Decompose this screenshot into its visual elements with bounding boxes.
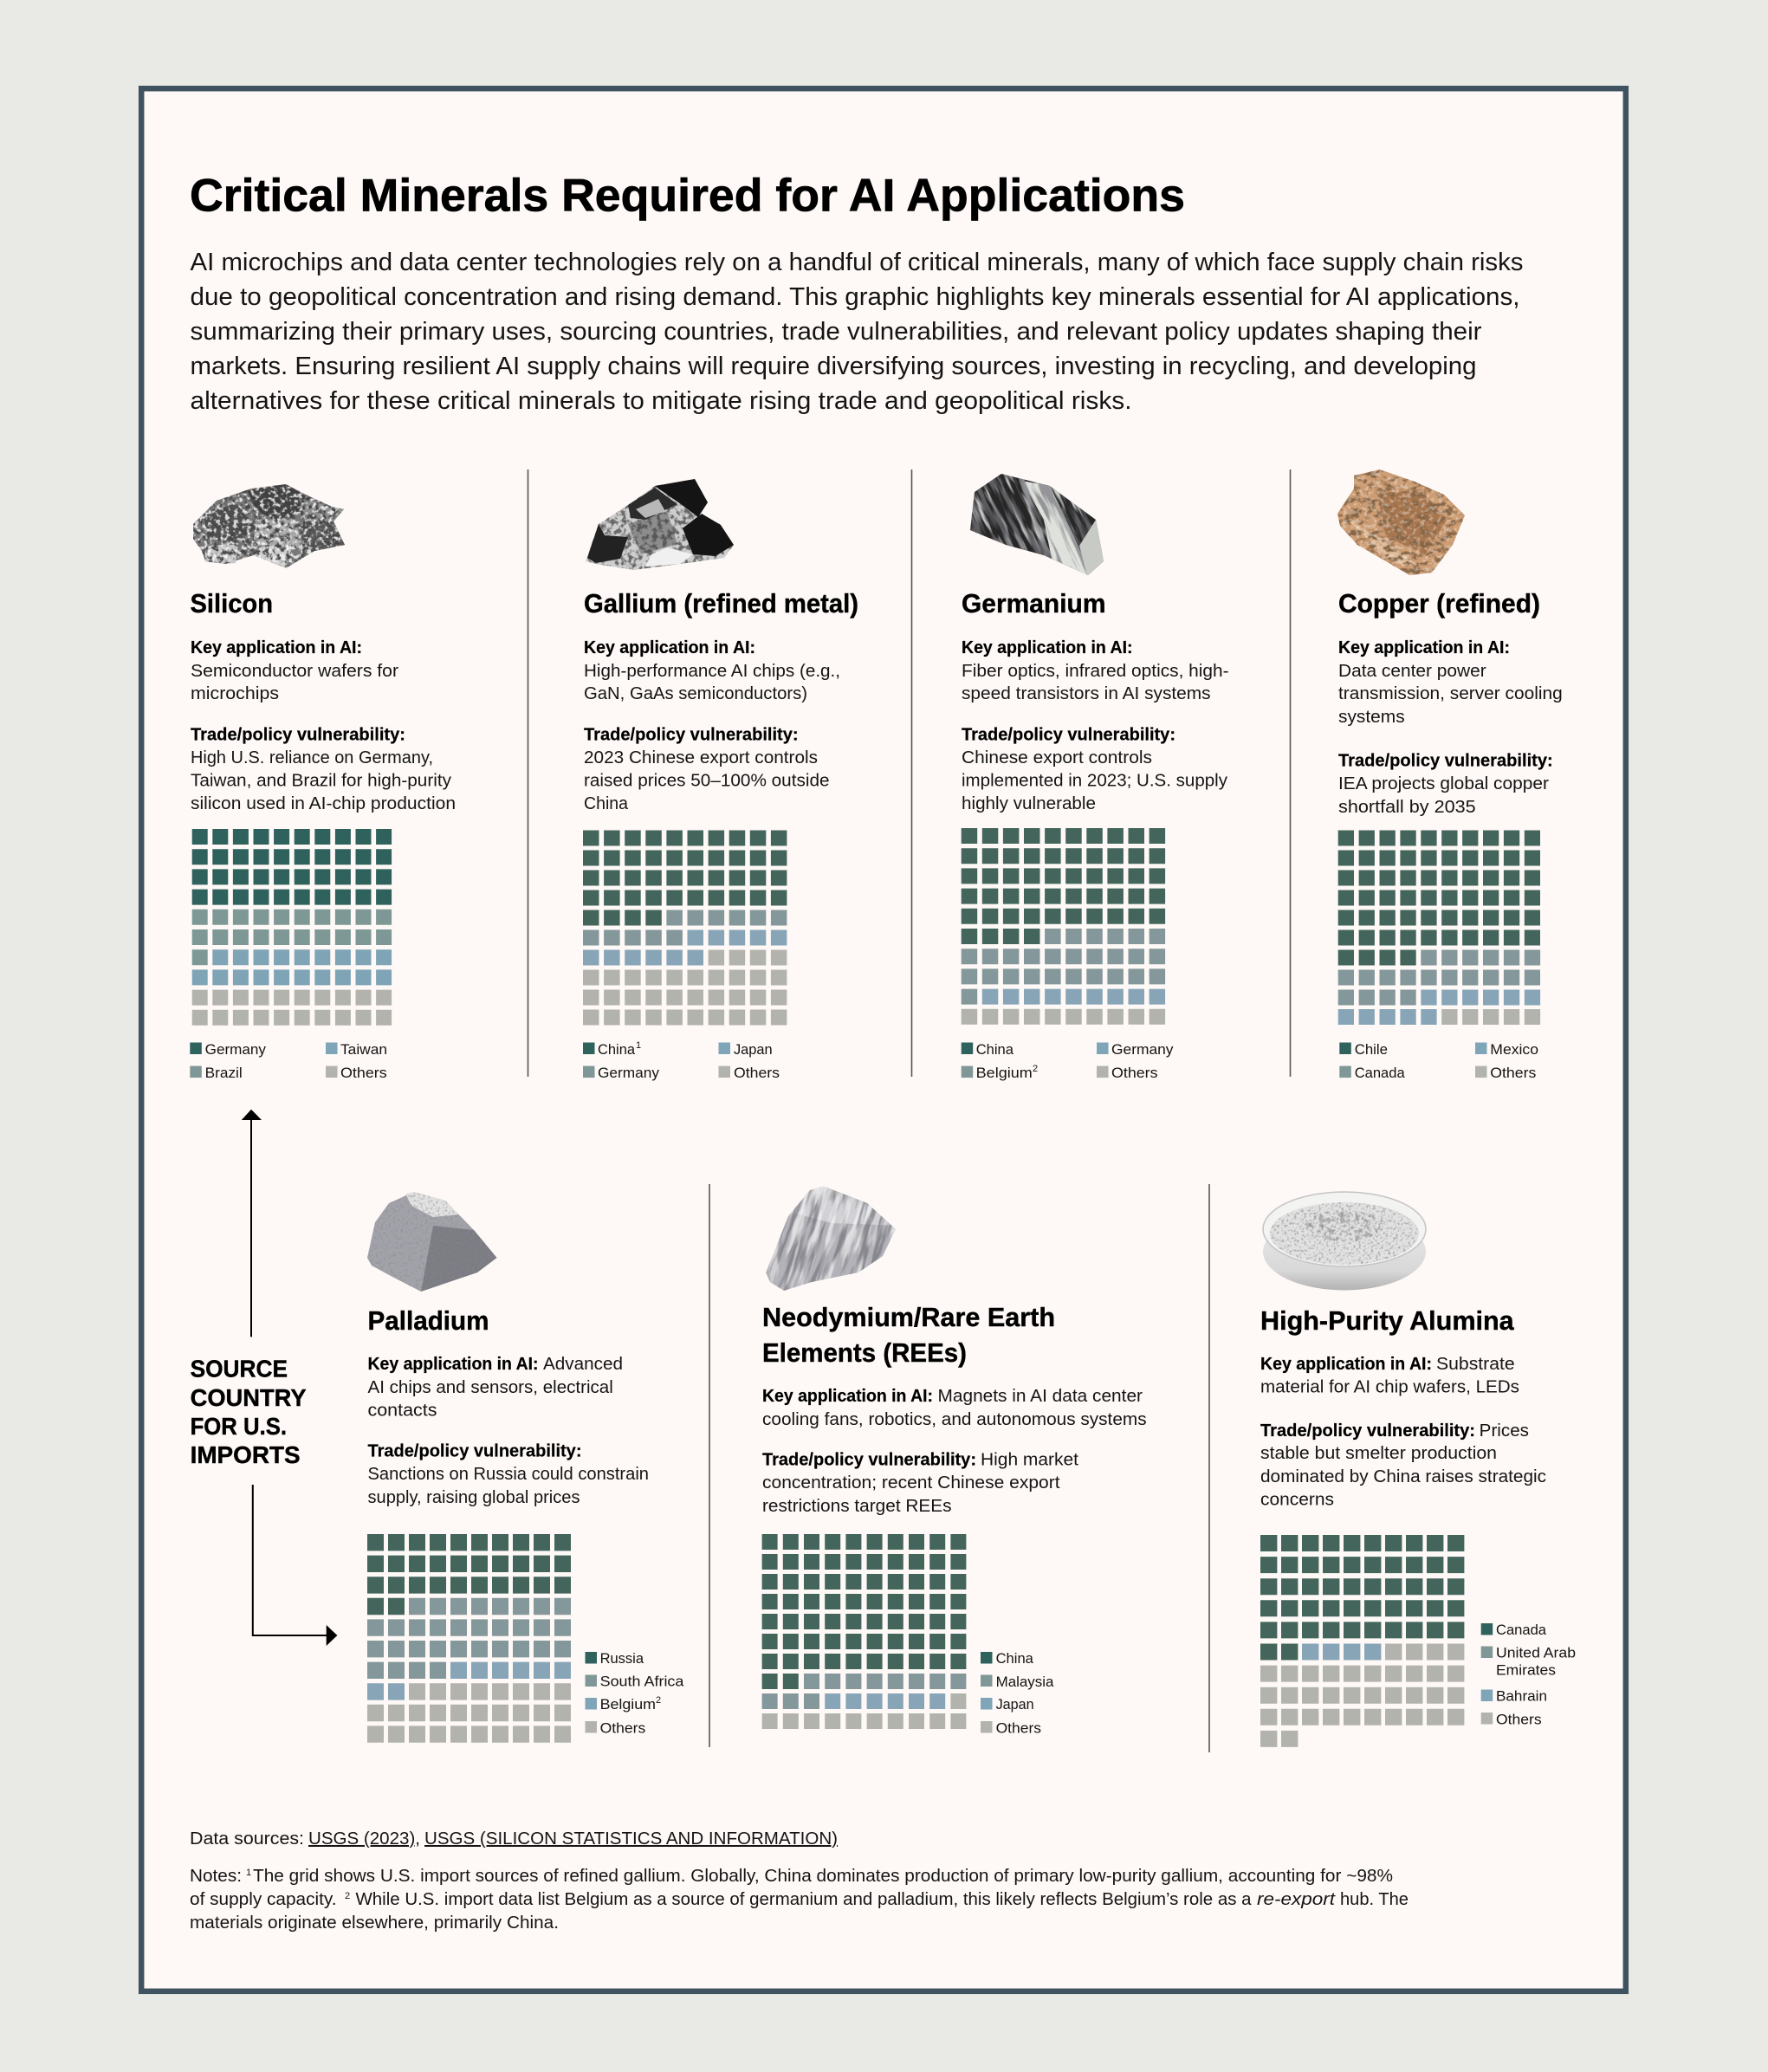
legend: Canada xyxy=(1496,1622,1547,1638)
notes: hub. The xyxy=(1340,1890,1409,1909)
trade vulnerability: implemented in 2023; U.S. supply xyxy=(962,771,1228,790)
legend: Bahrain xyxy=(1496,1688,1547,1705)
key application: Key application in AI: xyxy=(762,1386,933,1406)
legend: United Arab xyxy=(1496,1645,1576,1661)
legend: Taiwan xyxy=(340,1041,387,1058)
notes: re-export xyxy=(1257,1890,1337,1909)
notes xyxy=(190,1867,1409,1933)
trade vulnerability: High market xyxy=(981,1450,1078,1470)
icon: palladium rock xyxy=(367,1192,497,1292)
key application: Magnets in AI data center xyxy=(937,1386,1143,1406)
legend xyxy=(583,1040,780,1081)
legend: Japan xyxy=(734,1041,773,1058)
panel: germanium xyxy=(962,474,1228,1081)
trade vulnerability: Trade/policy vulnerability: xyxy=(762,1450,976,1470)
key application: AI chips and sensors, electrical xyxy=(367,1377,613,1397)
trade vulnerability: Trade/policy vulnerability: xyxy=(584,724,799,745)
key application: cooling fans, robotics, and autonomous systems xyxy=(762,1409,1147,1429)
legend: 2 xyxy=(656,1695,661,1706)
intro paragraph xyxy=(191,249,1523,415)
intro paragraph: alternatives for these critical minerals to mitigate rising trade and geopolitical risks. xyxy=(191,387,1131,415)
legend: Brazil xyxy=(205,1065,243,1081)
key application xyxy=(584,638,840,703)
icon: neodymium rock xyxy=(766,1187,896,1291)
trade vulnerability: restrictions target REEs xyxy=(762,1496,952,1516)
key application: High-performance AI chips (e.g., xyxy=(584,661,840,681)
trade vulnerability: IEA projects global copper xyxy=(1338,774,1549,793)
waffle chart xyxy=(583,839,787,1017)
waffle chart xyxy=(367,1543,571,1734)
legend: Canada xyxy=(1355,1065,1405,1081)
legend: Germany xyxy=(598,1065,659,1081)
legend xyxy=(586,1650,684,1736)
key application: Fiber optics, infrared optics, high- xyxy=(962,661,1229,681)
key application: material for AI chip wafers, LEDs xyxy=(1260,1377,1519,1397)
icon: gallium rock xyxy=(586,479,734,570)
trade vulnerability xyxy=(367,1441,649,1507)
legend: Germany xyxy=(1111,1041,1174,1058)
panel: gallium xyxy=(583,479,858,1081)
trade vulnerability xyxy=(1338,750,1553,817)
key application: transmission, server cooling xyxy=(1338,683,1563,703)
key application: Key application in AI: xyxy=(367,1354,539,1374)
key application xyxy=(367,1354,623,1421)
legend: Others xyxy=(996,1720,1041,1736)
mineral name: Palladium xyxy=(367,1305,489,1336)
legend: 2 xyxy=(1033,1064,1038,1074)
legend xyxy=(962,1041,1174,1081)
key application: Advanced xyxy=(543,1354,623,1374)
mineral name: Gallium (refined metal) xyxy=(584,588,858,618)
notes: The grid shows U.S. import sources of refined gallium. Globally, China dominates production of primary low-purity gallium, accounting for ~98% xyxy=(253,1867,1393,1886)
notes: Notes: xyxy=(190,1867,242,1886)
arrow: up to top row xyxy=(242,1110,262,1337)
key application xyxy=(1338,638,1563,727)
legend: Belgium xyxy=(976,1065,1033,1081)
legend xyxy=(190,1041,387,1081)
legend: Others xyxy=(734,1065,780,1081)
key application: Substrate xyxy=(1436,1354,1515,1374)
legend: Mexico xyxy=(1490,1041,1538,1058)
panel: high-purity alumina xyxy=(1260,1192,1576,1739)
trade vulnerability xyxy=(191,724,456,813)
legend: China xyxy=(598,1041,636,1058)
notes: 2 xyxy=(345,1891,350,1901)
trade vulnerability: Trade/policy vulnerability: xyxy=(1338,750,1553,771)
trade vulnerability: Trade/policy vulnerability: xyxy=(1260,1421,1475,1441)
mineral name: Elements (REEs) xyxy=(762,1337,967,1368)
data sources: Data sources: xyxy=(190,1829,304,1849)
legend: China xyxy=(976,1041,1014,1058)
legend: Emirates xyxy=(1496,1662,1556,1679)
panel: palladium xyxy=(367,1192,684,1736)
trade vulnerability: concentration; recent Chinese export xyxy=(762,1473,1060,1492)
legend: 1 xyxy=(636,1040,641,1051)
data sources xyxy=(190,1829,838,1849)
trade vulnerability: Trade/policy vulnerability: xyxy=(191,724,405,745)
trade vulnerability: shortfall by 2035 xyxy=(1338,797,1476,817)
icon: copper rock xyxy=(1337,469,1465,575)
key application xyxy=(762,1386,1147,1429)
trade vulnerability: supply, raising global prices xyxy=(367,1487,580,1507)
legend: Belgium xyxy=(600,1696,656,1713)
key application: Key application in AI: xyxy=(1338,638,1510,657)
trade vulnerability: stable but smelter production xyxy=(1260,1443,1497,1463)
legend xyxy=(1339,1041,1538,1081)
trade vulnerability: China xyxy=(584,793,629,813)
source country label: FOR U.S. xyxy=(191,1413,287,1440)
legend: Others xyxy=(600,1720,645,1736)
key application: Key application in AI: xyxy=(191,638,362,657)
key application: Semiconductor wafers for xyxy=(191,661,398,681)
trade vulnerability xyxy=(762,1450,1078,1516)
trade vulnerability: silicon used in AI-chip production xyxy=(191,793,456,813)
legend: Chile xyxy=(1355,1041,1388,1058)
trade vulnerability: Prices xyxy=(1480,1421,1529,1441)
notes: of supply capacity. xyxy=(190,1890,336,1909)
trade vulnerability: High U.S. reliance on Germany, xyxy=(191,748,433,767)
trade vulnerability: Trade/policy vulnerability: xyxy=(962,724,1175,745)
trade vulnerability: Sanctions on Russia could constrain xyxy=(367,1464,649,1484)
key application: microchips xyxy=(191,683,279,703)
trade vulnerability: Trade/policy vulnerability: xyxy=(367,1441,582,1460)
key application: contacts xyxy=(367,1400,437,1421)
key application: Data center power xyxy=(1338,661,1486,681)
legend: China xyxy=(996,1650,1033,1667)
key application xyxy=(962,638,1229,703)
mineral name: Copper (refined) xyxy=(1338,588,1540,618)
waffle chart xyxy=(962,836,1165,1017)
trade vulnerability xyxy=(584,724,830,813)
intro paragraph: summarizing their primary uses, sourcing countries, trade vulnerabilities, and relevant policy updates shaping their xyxy=(191,318,1482,346)
legend: Others xyxy=(340,1065,387,1081)
icon: silicon rock xyxy=(193,484,345,568)
arrow: right to bottom row xyxy=(253,1485,337,1646)
legend: Malaysia xyxy=(996,1674,1054,1690)
legend: Others xyxy=(1111,1065,1157,1081)
trade vulnerability: Taiwan, and Brazil for high-purity xyxy=(191,771,452,790)
legend: Others xyxy=(1496,1712,1542,1727)
source country label: SOURCE xyxy=(191,1355,288,1382)
intro paragraph: AI microchips and data center technologies rely on a handful of critical minerals, many of which face supply chain risks xyxy=(191,249,1523,276)
key application xyxy=(1260,1354,1519,1397)
notes: While U.S. import data list Belgium as a source of germanium and palladium, this likely reflects Belgium’s role as a xyxy=(355,1890,1252,1909)
intro paragraph: due to geopolitical concentration and rising demand. This graphic highlights key minerals essential for AI applications, xyxy=(191,283,1519,311)
title: Critical Minerals Required for AI Applications xyxy=(190,170,1185,221)
framed panel xyxy=(141,88,1626,1991)
data sources: USGS (SILICON STATISTICS AND INFORMATION) xyxy=(424,1829,838,1849)
legend: Germany xyxy=(205,1041,266,1058)
panel: copper xyxy=(1337,469,1563,1081)
mineral name: High-Purity Alumina xyxy=(1260,1305,1514,1336)
waffle chart xyxy=(1260,1544,1465,1739)
trade vulnerability: highly vulnerable xyxy=(962,793,1096,813)
trade vulnerability: raised prices 50–100% outside xyxy=(584,771,830,790)
waffle chart xyxy=(192,837,392,1018)
trade vulnerability: dominated by China raises strategic xyxy=(1260,1467,1546,1486)
mineral name: Neodymium/Rare Earth xyxy=(762,1302,1055,1332)
key application: Key application in AI: xyxy=(584,638,755,657)
trade vulnerability: Chinese export controls xyxy=(962,748,1152,767)
trade vulnerability xyxy=(962,724,1228,813)
intro paragraph: markets. Ensuring resilient AI supply chains will require diversifying sources, investing in recycling, and developing xyxy=(191,353,1477,380)
legend xyxy=(981,1650,1054,1736)
notes: materials originate elsewhere, primarily China. xyxy=(190,1913,559,1933)
mineral name: Germanium xyxy=(962,588,1105,618)
key application: GaN, GaAs semiconductors) xyxy=(584,683,807,703)
icon: alumina dish xyxy=(1263,1192,1426,1291)
legend: Others xyxy=(1490,1065,1536,1081)
legend xyxy=(1481,1622,1576,1727)
trade vulnerability: 2023 Chinese export controls xyxy=(584,748,818,767)
source country label xyxy=(191,1355,307,1468)
trade vulnerability xyxy=(1260,1421,1546,1510)
waffle chart xyxy=(762,1542,967,1721)
key application: systems xyxy=(1338,707,1405,727)
key application xyxy=(191,638,398,703)
key application: speed transistors in AI systems xyxy=(962,683,1211,703)
icon: germanium rock xyxy=(970,474,1104,575)
trade vulnerability: concerns xyxy=(1260,1490,1334,1510)
legend: South Africa xyxy=(600,1674,684,1690)
source country label: IMPORTS xyxy=(191,1441,301,1468)
mineral name: Silicon xyxy=(191,588,273,618)
notes: 1 xyxy=(246,1868,251,1878)
key application: Key application in AI: xyxy=(962,638,1133,657)
legend: Russia xyxy=(600,1650,644,1667)
source country label: COUNTRY xyxy=(191,1384,307,1411)
panel: neodymium xyxy=(762,1187,1146,1732)
panel: silicon xyxy=(190,484,456,1081)
legend: Japan xyxy=(996,1696,1034,1713)
key application: Key application in AI: xyxy=(1260,1354,1432,1374)
data sources: USGS (2023), xyxy=(308,1829,420,1849)
waffle chart xyxy=(1338,839,1540,1017)
mineral name xyxy=(762,1302,1055,1368)
